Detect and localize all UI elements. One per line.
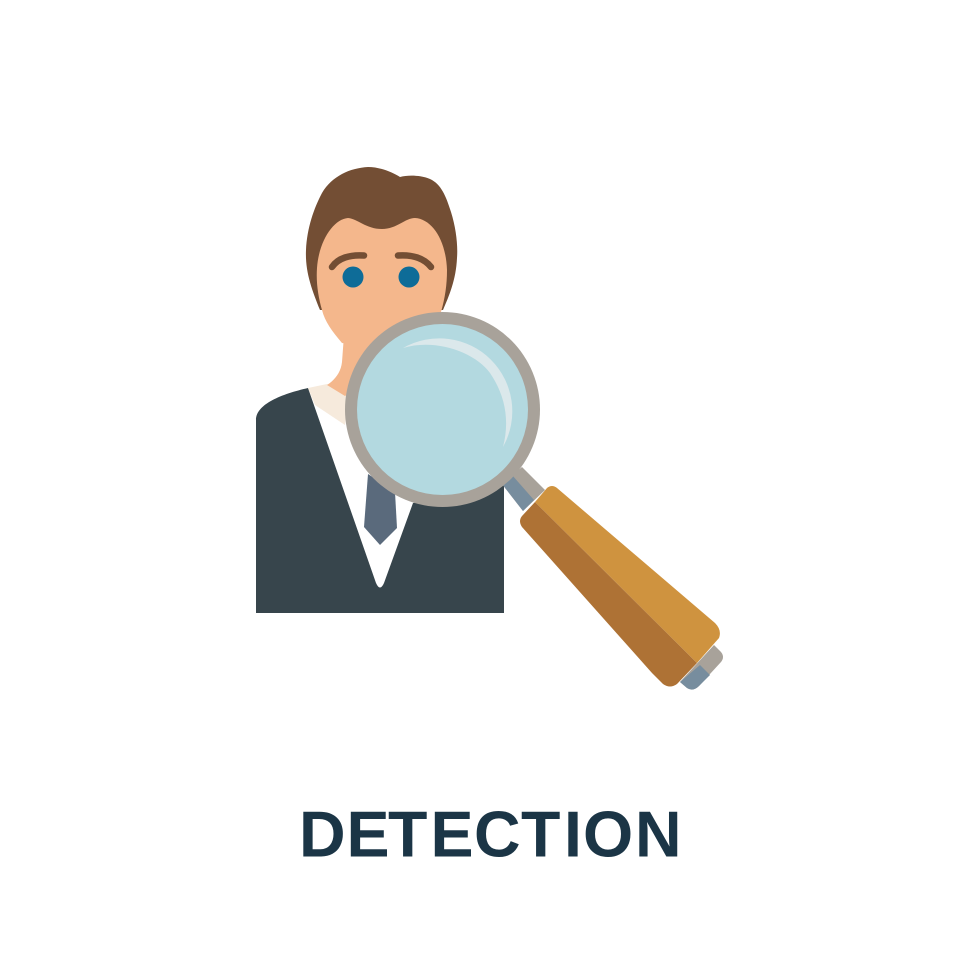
- left eyebrow: [332, 255, 364, 267]
- icon: person: [256, 167, 504, 613]
- collar: [308, 384, 350, 425]
- lens highlight: [403, 338, 512, 447]
- handle light side: [535, 486, 720, 663]
- title: DETECTION: [299, 798, 682, 870]
- right eyebrow: [398, 255, 431, 267]
- right eye: [398, 266, 420, 288]
- neck: [327, 335, 400, 396]
- end cap shadow: [680, 665, 710, 690]
- hair: [306, 167, 457, 310]
- metal rod shadow: [502, 475, 534, 511]
- face: [317, 218, 447, 350]
- metal rod: [502, 467, 545, 511]
- end cap: [680, 645, 723, 690]
- icon: magnifying glass: [345, 312, 723, 690]
- tie: [364, 474, 397, 545]
- suit jacket: [256, 388, 504, 613]
- handle dark side: [520, 502, 697, 686]
- left eye: [342, 266, 364, 288]
- shirt: [308, 384, 440, 588]
- lens rim: [345, 312, 540, 507]
- lens glass: [357, 324, 528, 495]
